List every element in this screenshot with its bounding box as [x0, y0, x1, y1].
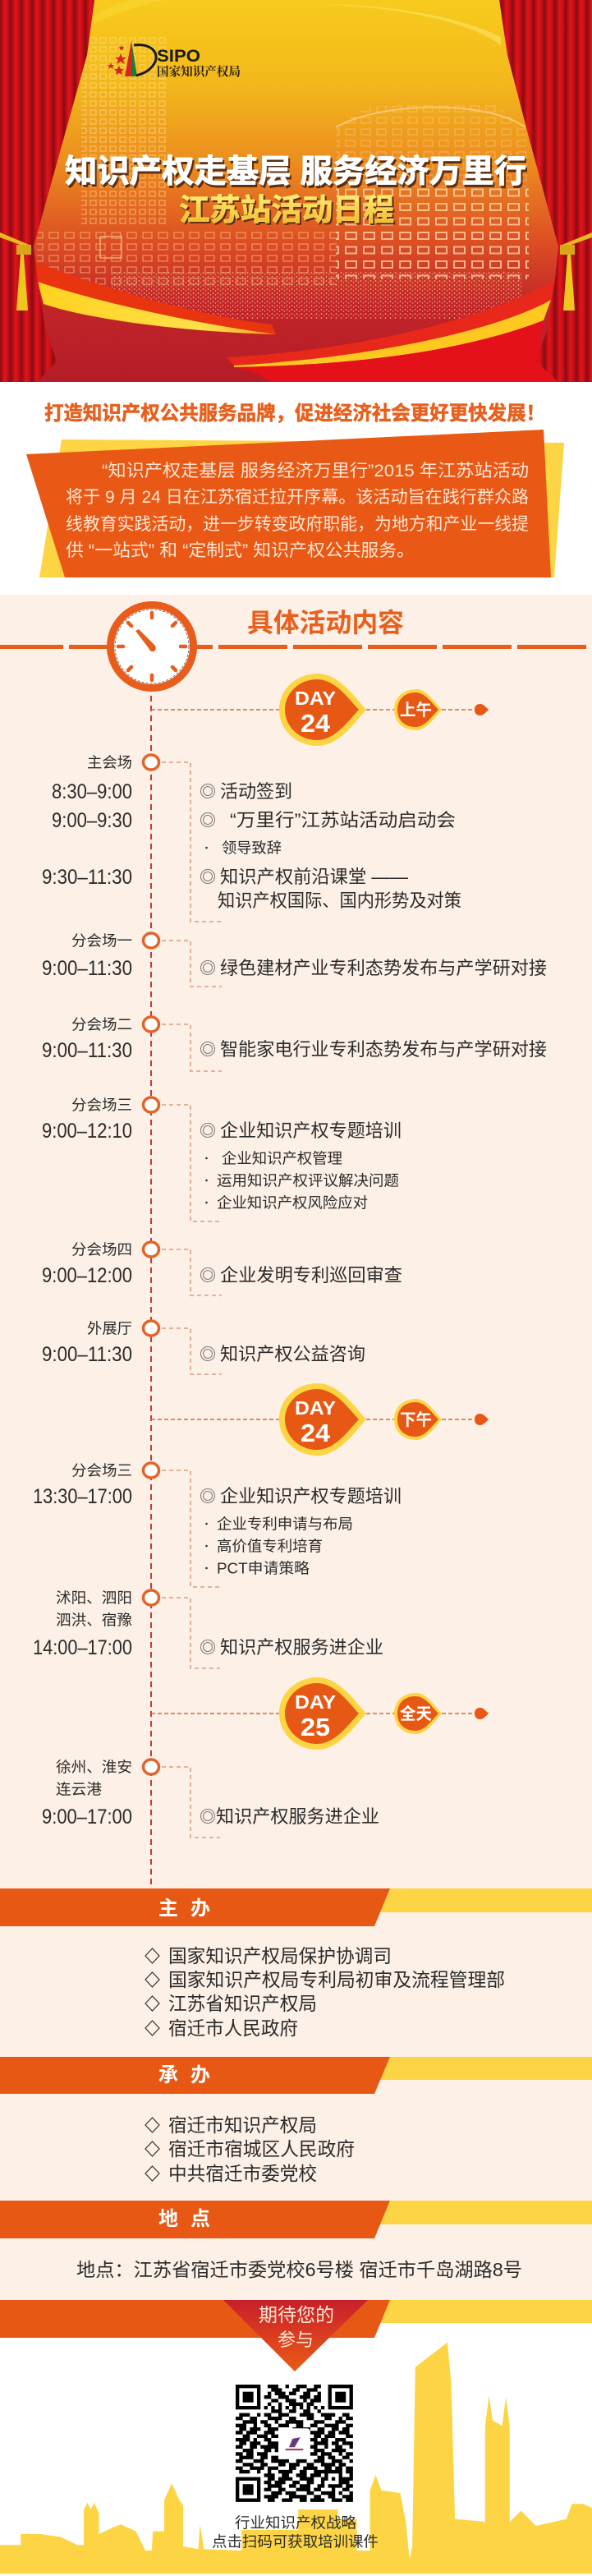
badge: day 24 morning: [151, 674, 489, 746]
activity items: 高价值专利培育: [217, 1538, 323, 1554]
venue and time labels: 9:00–12:00: [42, 1264, 132, 1287]
small dot bullets: [205, 847, 208, 1569]
skyline: [0, 2343, 592, 2574]
venue and time labels: 外展厅: [87, 1321, 132, 1337]
section band: organizers: [0, 1888, 592, 1926]
badge: day 24 morning: 24: [301, 709, 331, 738]
activity items: 企业专利申请与布局: [217, 1516, 353, 1533]
badge: day 24 afternoon: 24: [301, 1419, 331, 1447]
activity items: “万里行”江苏站活动启动会: [230, 810, 456, 830]
venue and time labels: 14:00–17:00: [33, 1636, 132, 1659]
badge: day 25 all day: 全天: [400, 1704, 432, 1723]
venue and time labels: 13:30–17:00: [33, 1485, 132, 1508]
ribbon swooshes: [34, 261, 558, 382]
venue and time labels: 9:30–11:30: [42, 866, 132, 889]
logo: SIPO: SIPO: [157, 47, 200, 66]
badge: day 24 afternoon: [151, 1383, 489, 1456]
left curtain: [0, 0, 94, 382]
venue and time labels: 9:00–12:10: [42, 1120, 132, 1143]
venue and time labels: [33, 754, 132, 1828]
double circle bullets: [200, 784, 215, 1824]
left curtain tassel: [0, 232, 31, 310]
activity items: 知识产权前沿课堂 ——: [220, 867, 408, 887]
hero banner: [0, 0, 592, 382]
activity items: 智能家电行业专利态势发布与产学研对接: [220, 1039, 547, 1060]
venue and time labels: 9:00–17:00: [42, 1806, 132, 1828]
section band: co-organizers: 承: [158, 2064, 178, 2086]
badge: day 25 all day: DAY: [295, 1691, 336, 1713]
venue and time labels: 8:30–9:00: [52, 780, 132, 803]
badge: day 24 morning: 上午: [400, 701, 432, 720]
section band: join us: 参与: [278, 2330, 314, 2350]
badge: day 25 all day: [151, 1677, 489, 1750]
list: organizers: 江苏省知识产权局: [168, 1993, 317, 2014]
section band: organizers: 主: [158, 1898, 178, 1920]
venue and time labels: 连云港: [56, 1781, 102, 1797]
activity items: 绿色建材产业专利态势发布与产学研对接: [220, 958, 547, 978]
QR caption: [212, 2515, 379, 2550]
timeline nodes: [143, 755, 159, 1774]
section band: join us: 期待您的: [259, 2304, 334, 2325]
activity items: 活动签到: [220, 781, 292, 802]
strapline: 打造知识产权公共服务品牌，促进经济社会更好更快发展！: [44, 402, 545, 425]
main title: 知识产权走基层 服务经济万里行: [65, 154, 526, 190]
venue and time labels: 分会场三: [71, 1462, 132, 1479]
badge: day 24 afternoon: 下午: [400, 1410, 432, 1429]
intro text: 供 “一站式” 和 “定制式” 知识产权公共服务。: [66, 541, 415, 560]
activity items: 知识产权服务进企业: [220, 1637, 383, 1658]
list: co-organizers: [145, 2114, 355, 2184]
venue and time labels: 分会场四: [71, 1242, 132, 1258]
right curtain tassel: [560, 232, 592, 310]
section band: organizers: 办: [190, 1898, 210, 1920]
section band: venue: 点: [190, 2208, 210, 2230]
intro text: “知识产权走基层 服务经济万里行”2015 年江苏站活动: [102, 462, 529, 481]
intro text: [66, 462, 529, 560]
timeline connector brackets: [162, 762, 222, 1838]
list: organizers: [145, 1945, 505, 2039]
section band: co-organizers: [0, 2057, 592, 2094]
activity items: 知识产权服务进企业: [216, 1806, 379, 1827]
activity items: 企业发明专利巡回审查: [220, 1265, 402, 1286]
activity items: 企业知识产权专题培训: [220, 1120, 402, 1141]
list: organizers: 国家知识产权局保护协调司: [168, 1945, 392, 1966]
building line art: [37, 35, 529, 319]
heading: activity content: 具体活动内容: [247, 608, 404, 637]
QR code: [236, 2385, 353, 2502]
activity items: 企业知识产权管理: [222, 1150, 342, 1166]
list: organizers: 国家知识产权局专利局初审及流程管理部: [168, 1969, 505, 1990]
section band: join us: [0, 2300, 592, 2371]
badge: day 24 morning: DAY: [295, 688, 336, 709]
badge: day 25 all day: 25: [301, 1713, 330, 1741]
list: co-organizers: 宿迁市知识产权局: [168, 2114, 317, 2136]
section band: venue: [0, 2201, 592, 2238]
activity items: 知识产权国际、国内形势及对策: [218, 890, 461, 911]
subtitle: 江苏站活动日程: [179, 193, 394, 227]
clock divider line: [0, 645, 592, 649]
venue and time labels: 主会场: [87, 754, 132, 770]
schedule panel background: [0, 595, 592, 2300]
venue and time labels: 泗洪、宿豫: [56, 1612, 132, 1628]
list: co-organizers: 中共宿迁市委党校: [168, 2163, 317, 2184]
activity items: [216, 781, 547, 1827]
section band: co-organizers: 办: [190, 2064, 210, 2086]
right curtain: [499, 0, 592, 382]
venue and time labels: 分会场二: [71, 1017, 132, 1033]
logo: SIPO: [108, 41, 241, 79]
venue and time labels: 分会场一: [71, 933, 132, 950]
QR caption: 行业知识产权战略: [235, 2515, 356, 2532]
activity items: PCT申请策略: [217, 1561, 310, 1577]
list: organizers: 宿迁市人民政府: [168, 2017, 298, 2039]
intro panel: [26, 430, 564, 577]
activity items: 运用知识产权评议解决问题: [217, 1173, 399, 1189]
venue and time labels: 分会场三: [71, 1097, 132, 1114]
venue and time labels: 沭阳、泗阳: [56, 1590, 132, 1607]
timeline spine: [150, 696, 152, 1888]
icon: clock: [107, 601, 197, 692]
venue and time labels: 9:00–9:30: [52, 809, 132, 832]
venue address: 地点：江苏省宿迁市委党校6号楼 宿迁市千岛湖路8号: [76, 2259, 522, 2280]
activity items: 领导致辞: [222, 840, 282, 856]
intro text: 将于 9 月 24 日在江苏宿迁拉开序幕。该活动旨在践行群众路: [66, 488, 529, 507]
venue and time labels: 9:00–11:30: [42, 1343, 132, 1366]
venue and time labels: 9:00–11:30: [42, 957, 132, 980]
logo: SIPO: 国家知识产权局: [157, 64, 241, 79]
activity items: 企业知识产权专题培训: [220, 1486, 402, 1506]
activity items: 企业知识产权风险应对: [217, 1194, 368, 1211]
list: co-organizers: 宿迁市宿城区人民政府: [168, 2138, 355, 2160]
QR caption: 点击扫码可获取培训课件: [212, 2533, 379, 2550]
activity items: 知识产权公益咨询: [220, 1344, 365, 1364]
section band: venue: 地: [158, 2208, 178, 2230]
intro text: 线教育实践活动，进一步转变政府职能，为地方和产业一线提: [66, 515, 529, 534]
venue and time labels: 9:00–11:30: [42, 1039, 132, 1062]
badge: day 24 afternoon: DAY: [295, 1397, 336, 1419]
venue and time labels: 徐州、淮安: [56, 1760, 132, 1776]
